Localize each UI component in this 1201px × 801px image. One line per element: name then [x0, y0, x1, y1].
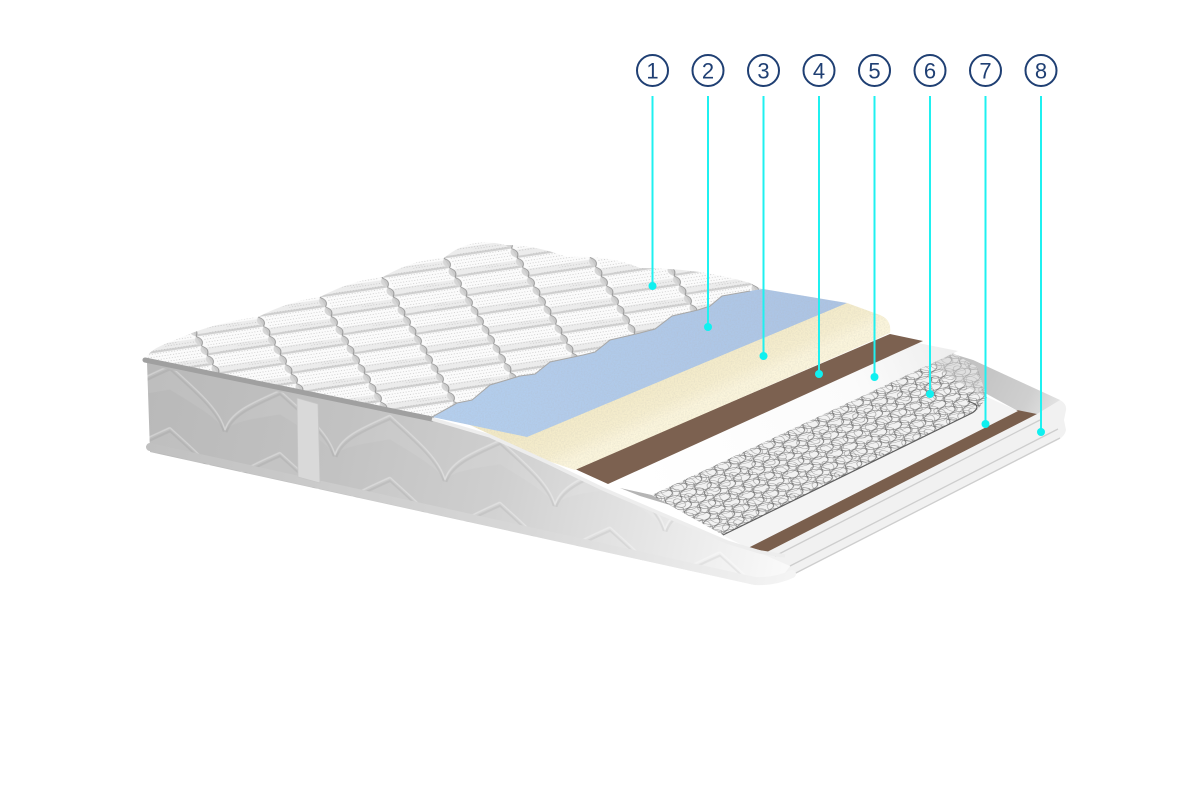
- number badge 3: [748, 55, 779, 86]
- number badge 1: [637, 55, 668, 86]
- slope piping: [432, 419, 785, 556]
- callout 3: [748, 55, 779, 360]
- top piping: [145, 360, 432, 419]
- layer 3: yellow foam: [470, 303, 890, 470]
- number badge 2: [692, 55, 724, 86]
- number badge 4: 4: [813, 58, 825, 84]
- leaf stitching: [148, 368, 740, 574]
- number badge 7: 7: [979, 58, 992, 84]
- leader line 8: [1037, 96, 1045, 436]
- layer 5: white padding: [606, 343, 958, 495]
- leader line 5: [870, 96, 878, 381]
- number badge 8: [1026, 55, 1056, 86]
- callout 7: [970, 55, 1001, 428]
- number badge 5: 5: [868, 58, 881, 84]
- number badge 6: [914, 55, 946, 86]
- leader line 4: [815, 96, 823, 378]
- number badge 1: 1: [646, 58, 659, 84]
- mattress cutaway illustration: [145, 242, 1066, 587]
- mattress side panel: [145, 360, 797, 587]
- rim inner wall: [950, 353, 1060, 414]
- leader line 1: [648, 96, 656, 290]
- callout 6: [914, 55, 946, 398]
- leader line 7: [982, 96, 990, 428]
- layer 1: quilted top: [146, 242, 762, 417]
- callout 8: [1026, 55, 1056, 436]
- callout 2: [692, 55, 724, 331]
- layer 7: white fabric strip: [722, 397, 1018, 548]
- callout 5: [859, 55, 890, 381]
- spring coils: [648, 353, 987, 535]
- number badge 7: [970, 55, 1001, 86]
- leader line 3: [760, 96, 768, 360]
- quilt surface: [146, 242, 762, 417]
- spring tangled wires: [648, 353, 987, 535]
- spring frame wire: [723, 401, 977, 535]
- callout 1: [637, 55, 668, 290]
- layer 4: brown coconut fibre: [575, 334, 923, 484]
- layer 8: outer cover tray rim: [740, 360, 1066, 585]
- side fabric: [147, 362, 790, 585]
- number badge 4: [804, 55, 834, 86]
- number badge 6: 6: [924, 58, 936, 84]
- leader line 2: [704, 96, 712, 331]
- bottom piping: [150, 447, 792, 581]
- callout 4: [804, 55, 834, 378]
- number badge 3: 3: [757, 58, 770, 84]
- rim groove: [775, 420, 1060, 576]
- layer 7: lower felt strip: [747, 410, 1037, 552]
- number badge 8: 8: [1035, 58, 1047, 84]
- leader line 6: [926, 96, 934, 398]
- handle strap: [297, 398, 320, 483]
- quilt cut shadow: [432, 291, 750, 417]
- number badge 5: [859, 55, 890, 86]
- number badge 2: 2: [702, 58, 714, 84]
- layer 2: blue memory foam: [432, 289, 847, 437]
- layer 6: spring block: [620, 353, 987, 535]
- back faded coils: [930, 353, 987, 398]
- spring corner shadow: [620, 488, 670, 505]
